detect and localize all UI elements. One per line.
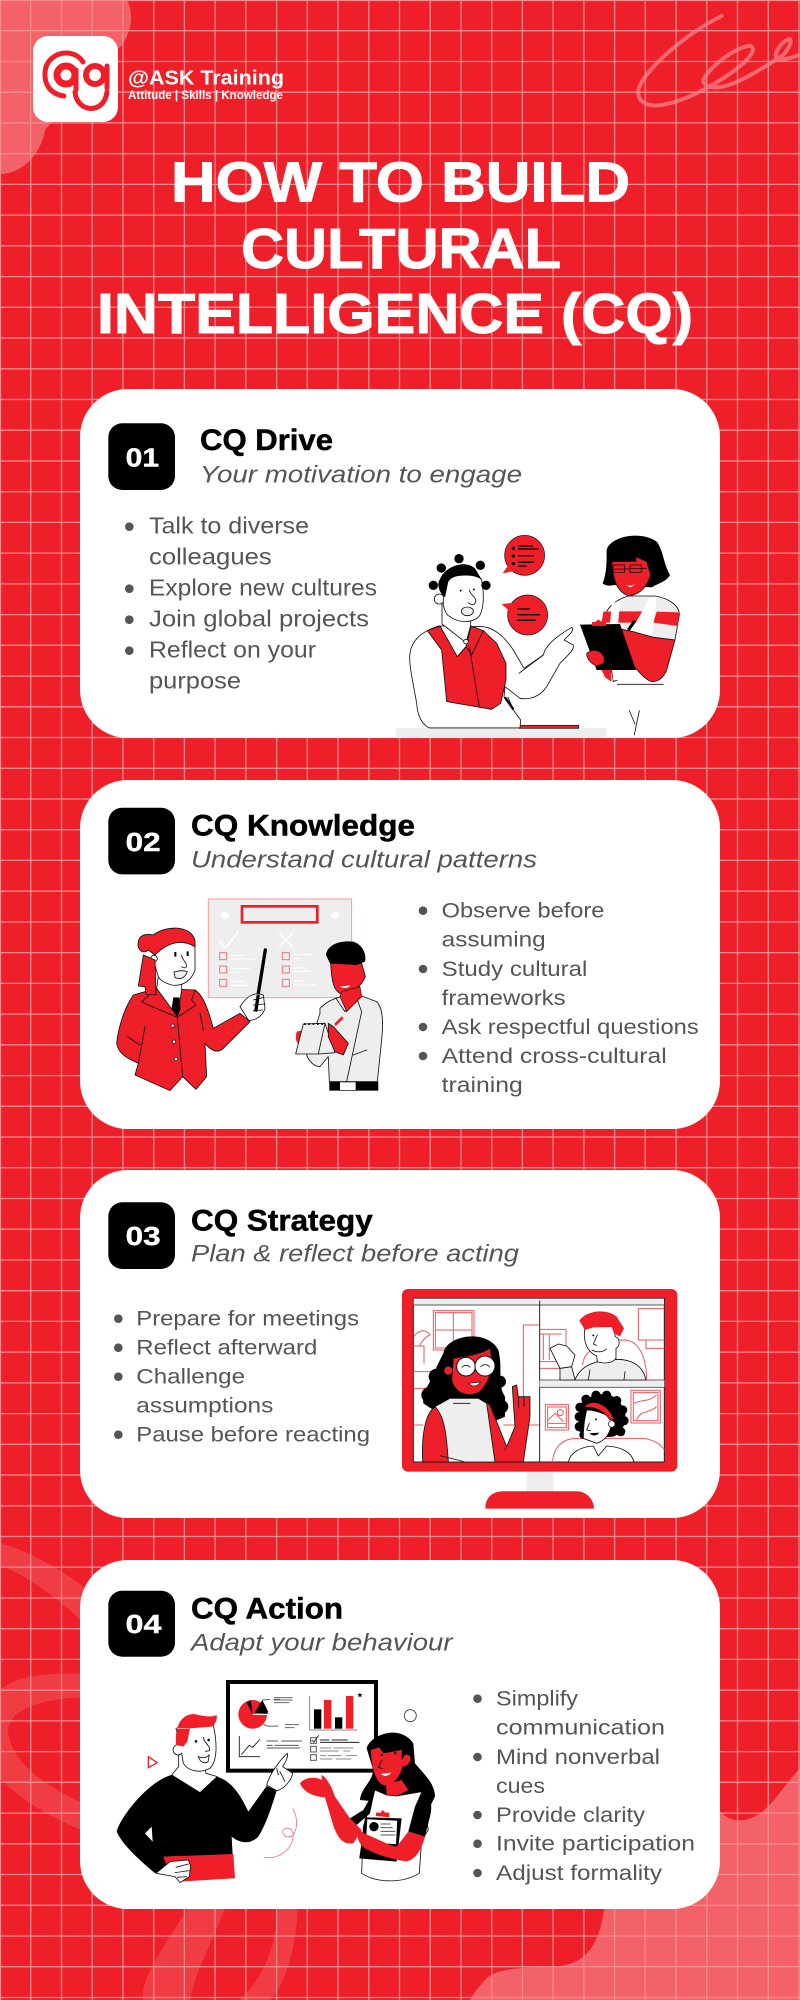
bullet list: Reflect on your bbox=[149, 637, 316, 663]
bullet list: colleagues bbox=[149, 543, 272, 569]
heading: CQ Knowledge bbox=[191, 810, 415, 843]
bullet list: assuming bbox=[442, 928, 546, 952]
illustration: presenters at a data chart: ★ bbox=[357, 1690, 364, 1699]
panel: CQ Knowledge bbox=[80, 780, 720, 1129]
panel: CQ Action bbox=[80, 1560, 720, 1909]
number badge 04: 04 bbox=[126, 1609, 162, 1639]
number badge 01: 01 bbox=[126, 443, 159, 473]
bullet list bbox=[473, 1687, 695, 1885]
logo bbox=[33, 36, 284, 122]
bullet list: Study cultural bbox=[442, 957, 587, 981]
card background bbox=[80, 1560, 720, 1909]
bullet list: Join global projects bbox=[149, 606, 369, 632]
bullet list: Observe before bbox=[442, 899, 604, 923]
title bbox=[97, 151, 693, 346]
bullet list: cues bbox=[496, 1774, 545, 1798]
subheading: Plan & reflect before acting bbox=[191, 1241, 520, 1268]
bullet list bbox=[125, 512, 377, 694]
number badge 03 bbox=[108, 1202, 175, 1269]
bullet list: Invite participation bbox=[496, 1832, 695, 1856]
bullet list: training bbox=[442, 1073, 523, 1097]
logo tile bbox=[33, 36, 118, 122]
bullet list bbox=[419, 899, 699, 1097]
bullet list: communication bbox=[496, 1716, 665, 1740]
decorative blob: lower right bbox=[470, 1760, 800, 2000]
number badge 04 bbox=[108, 1591, 175, 1657]
number badge 03: 03 bbox=[126, 1221, 161, 1251]
card background bbox=[80, 780, 720, 1129]
brand tagline: Attitude | Skills | Knowledge bbox=[128, 90, 283, 102]
bullet list: frameworks bbox=[442, 986, 566, 1010]
title: HOW TO BUILD bbox=[171, 151, 630, 215]
logo mark bbox=[45, 53, 107, 109]
subheading: Adapt your behaviour bbox=[189, 1630, 454, 1657]
bullet list: Talk to diverse bbox=[149, 512, 309, 538]
bullet list bbox=[114, 1307, 370, 1447]
bullet list: purpose bbox=[149, 668, 241, 694]
bullet list: Prepare for meetings bbox=[136, 1307, 359, 1331]
decorative blob: top left bbox=[0, 0, 131, 174]
bullet list: Adjust formality bbox=[496, 1861, 662, 1885]
heading: CQ Action bbox=[191, 1592, 343, 1625]
illustration: presenters at a data chart bbox=[117, 1682, 435, 1883]
number badge 01 bbox=[108, 423, 175, 490]
number badge 02: 02 bbox=[126, 827, 161, 857]
brand name: @ASK Training bbox=[128, 68, 284, 90]
card background bbox=[80, 1170, 720, 1518]
heading: CQ Strategy bbox=[191, 1205, 373, 1238]
illustration: trainer at a checklist board bbox=[117, 899, 383, 1091]
bullet list: Pause before reacting bbox=[136, 1423, 370, 1447]
decorative scribble: top right bbox=[638, 16, 800, 106]
bullet list: Provide clarity bbox=[496, 1803, 645, 1827]
panel: CQ Drive bbox=[80, 389, 720, 738]
bullet list: Attend cross-cultural bbox=[442, 1044, 667, 1068]
subheading: Your motivation to engage bbox=[200, 461, 522, 488]
decorative swirl: lower left bbox=[0, 1543, 298, 2000]
title: INTELLIGENCE (CQ) bbox=[97, 282, 693, 346]
illustration: two colleagues talking bbox=[396, 535, 679, 737]
subheading: Understand cultural patterns bbox=[191, 847, 537, 874]
title: CULTURAL bbox=[241, 217, 561, 281]
bullet list: Reflect afterward bbox=[136, 1336, 317, 1360]
panel: CQ Strategy bbox=[80, 1170, 720, 1518]
bullet list: Mind nonverbal bbox=[496, 1745, 660, 1769]
bullet list: Challenge bbox=[136, 1365, 245, 1389]
card background bbox=[80, 389, 720, 738]
number badge 02 bbox=[108, 808, 175, 874]
bullet list: assumptions bbox=[136, 1394, 273, 1418]
bullet list: Explore new cultures bbox=[149, 575, 377, 601]
heading: CQ Drive bbox=[200, 424, 333, 457]
bullet list: Simplify bbox=[496, 1687, 578, 1711]
illustration: video call on monitor bbox=[402, 1289, 677, 1509]
bullet list: Ask respectful questions bbox=[442, 1015, 699, 1039]
